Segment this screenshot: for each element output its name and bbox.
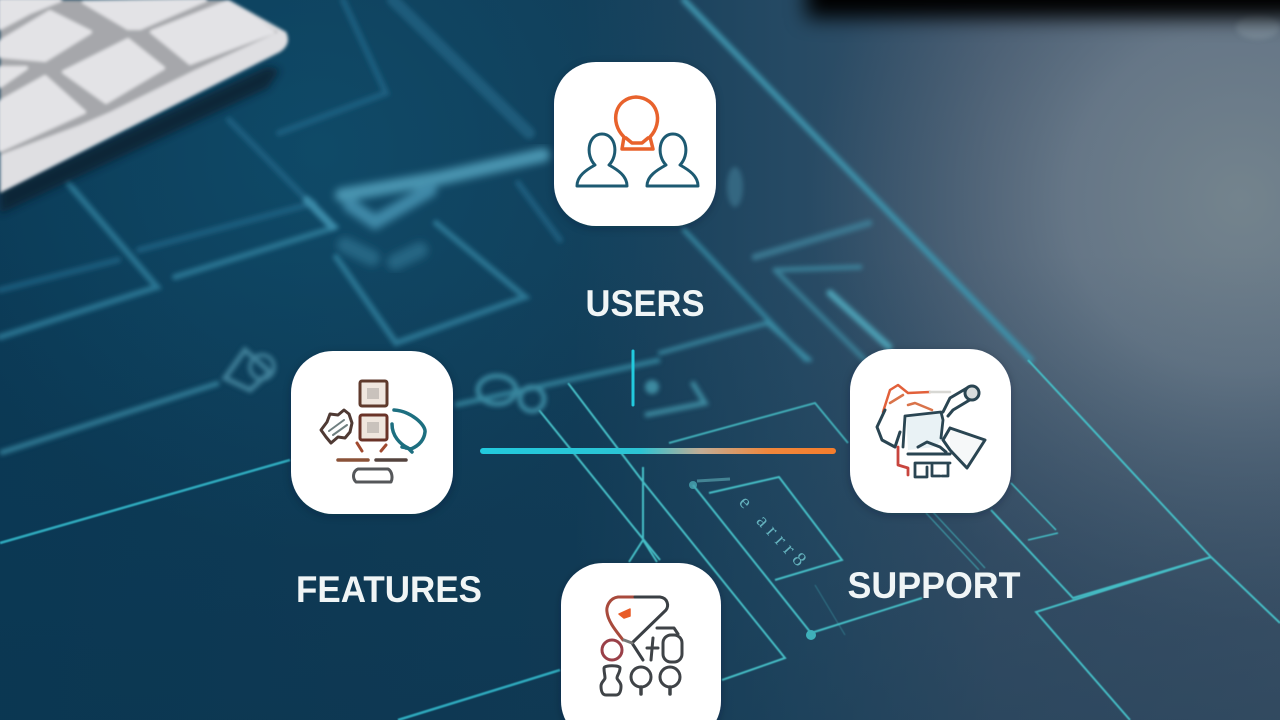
icon: support tools <box>877 385 985 477</box>
blurred mid lines and node symbols <box>0 15 1280 453</box>
panel: support <box>848 349 1021 606</box>
panel: users <box>554 62 716 324</box>
panel: features <box>291 351 482 610</box>
blurred blueprint lines, upper right <box>660 0 1031 360</box>
blurred blueprint lines, upper left <box>0 0 560 343</box>
panel: bottom <box>561 563 721 720</box>
small blueprint annotation: e arrr8 <box>734 491 810 571</box>
icon: bottom group <box>601 597 682 695</box>
blurred blueprint cloud band <box>342 155 543 262</box>
keyboard, top left <box>0 0 288 214</box>
label: support: SUPPORT <box>848 565 1021 606</box>
icon: features blocks <box>321 381 425 482</box>
connector: vertical stem <box>632 351 634 405</box>
connector: horizontal bar <box>480 448 836 454</box>
icon: users group <box>577 97 698 186</box>
dark object, top right <box>806 0 1280 18</box>
label: users: USERS <box>586 283 704 324</box>
sharp blueprint lines, centre and right <box>0 360 1280 720</box>
label: features: FEATURES <box>296 569 482 610</box>
